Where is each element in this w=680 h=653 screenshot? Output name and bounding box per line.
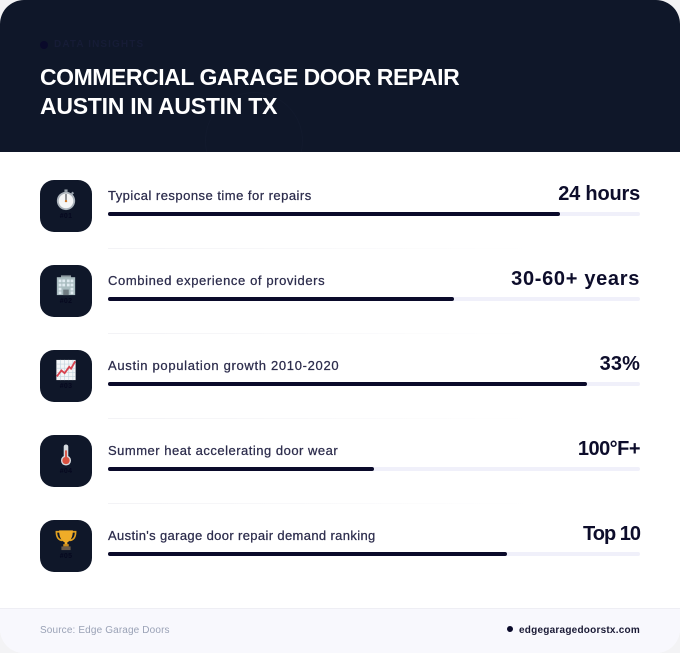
icon: thermometer: #04 (60, 468, 72, 475)
header panel (0, 0, 680, 152)
label: Typical response time for repairs (108, 188, 312, 203)
icon: stopwatch (40, 180, 92, 232)
value: 33% (600, 353, 640, 375)
eyebrow label: DATA INSIGHTS (54, 39, 144, 50)
icon: trophy (40, 520, 92, 572)
label: Austin population growth 2010-2020 (108, 358, 339, 373)
stat row: population growth (40, 350, 640, 402)
title: AUSTIN IN AUSTIN TX (40, 92, 277, 118)
value: 24 hours (558, 183, 640, 205)
source text: Source: Edge Garage Doors (40, 625, 170, 636)
title (40, 64, 460, 118)
progress bar 65% (108, 297, 640, 301)
icon: stopwatch: #01 (60, 213, 72, 220)
label: Austin's garage door repair demand ranking (108, 528, 376, 543)
stat row: response time (40, 180, 640, 232)
stat row: demand ranking (40, 520, 640, 572)
stat row: summer heat (40, 435, 640, 487)
footer (0, 608, 680, 653)
icon: office building: #02 (60, 298, 72, 305)
value: 30-60+ years (511, 268, 640, 290)
progress bar 90% (108, 382, 640, 386)
progress bar 50% (108, 467, 640, 471)
icon: rising chart (40, 350, 92, 402)
value: Top 10 (583, 523, 640, 545)
icon: rising chart: #03 (60, 383, 72, 390)
value: 100°F+ (578, 438, 640, 460)
label: Summer heat accelerating door wear (108, 443, 338, 458)
label: Combined experience of providers (108, 273, 325, 288)
title: COMMERCIAL GARAGE DOOR REPAIR (40, 64, 459, 90)
progress bar 75% (108, 552, 640, 556)
progress bar 85% (108, 212, 640, 216)
website link: edgegaragedoorstx.com (519, 625, 640, 636)
stat row: experience (40, 265, 640, 317)
icon: office building (40, 265, 92, 317)
icon: trophy: #05 (60, 553, 72, 560)
icon: thermometer (40, 435, 92, 487)
